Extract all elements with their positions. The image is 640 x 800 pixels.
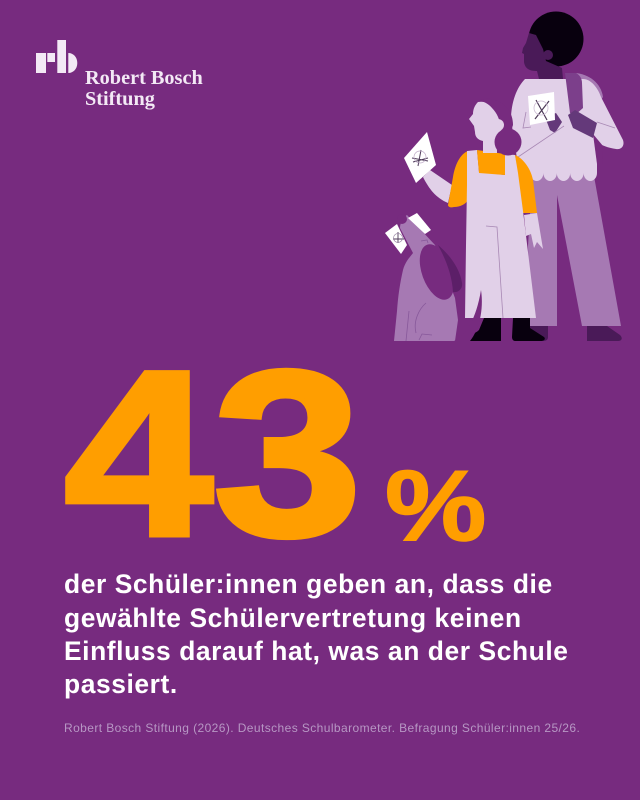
main statement: passiert.	[64, 669, 178, 699]
figure: child	[404, 99, 545, 341]
logo wordmark: Stiftung	[85, 88, 155, 110]
percent sign: %	[385, 450, 486, 562]
source note: Robert Bosch Stiftung (2026). Deutsches Schulbarometer. Befragung Schüler:innen 25/26.	[64, 721, 580, 735]
main statement: der Schüler:innen geben an, dass die	[64, 569, 553, 599]
main statement: gewählte Schülervertretung keinen	[64, 603, 522, 633]
big number: 43: 43	[64, 322, 361, 586]
main statement	[64, 569, 569, 699]
logo wordmark: Robert Bosch	[85, 67, 203, 89]
main statement: Einfluss darauf hat, was an der Schule	[64, 636, 569, 666]
logo wordmark	[85, 67, 203, 110]
illustration: woman, child and dog voting	[385, 12, 624, 341]
logo mark	[36, 40, 78, 73]
figure: dog	[385, 213, 482, 341]
logo: Robert Bosch Stiftung	[36, 40, 203, 110]
figure: woman	[511, 12, 624, 341]
